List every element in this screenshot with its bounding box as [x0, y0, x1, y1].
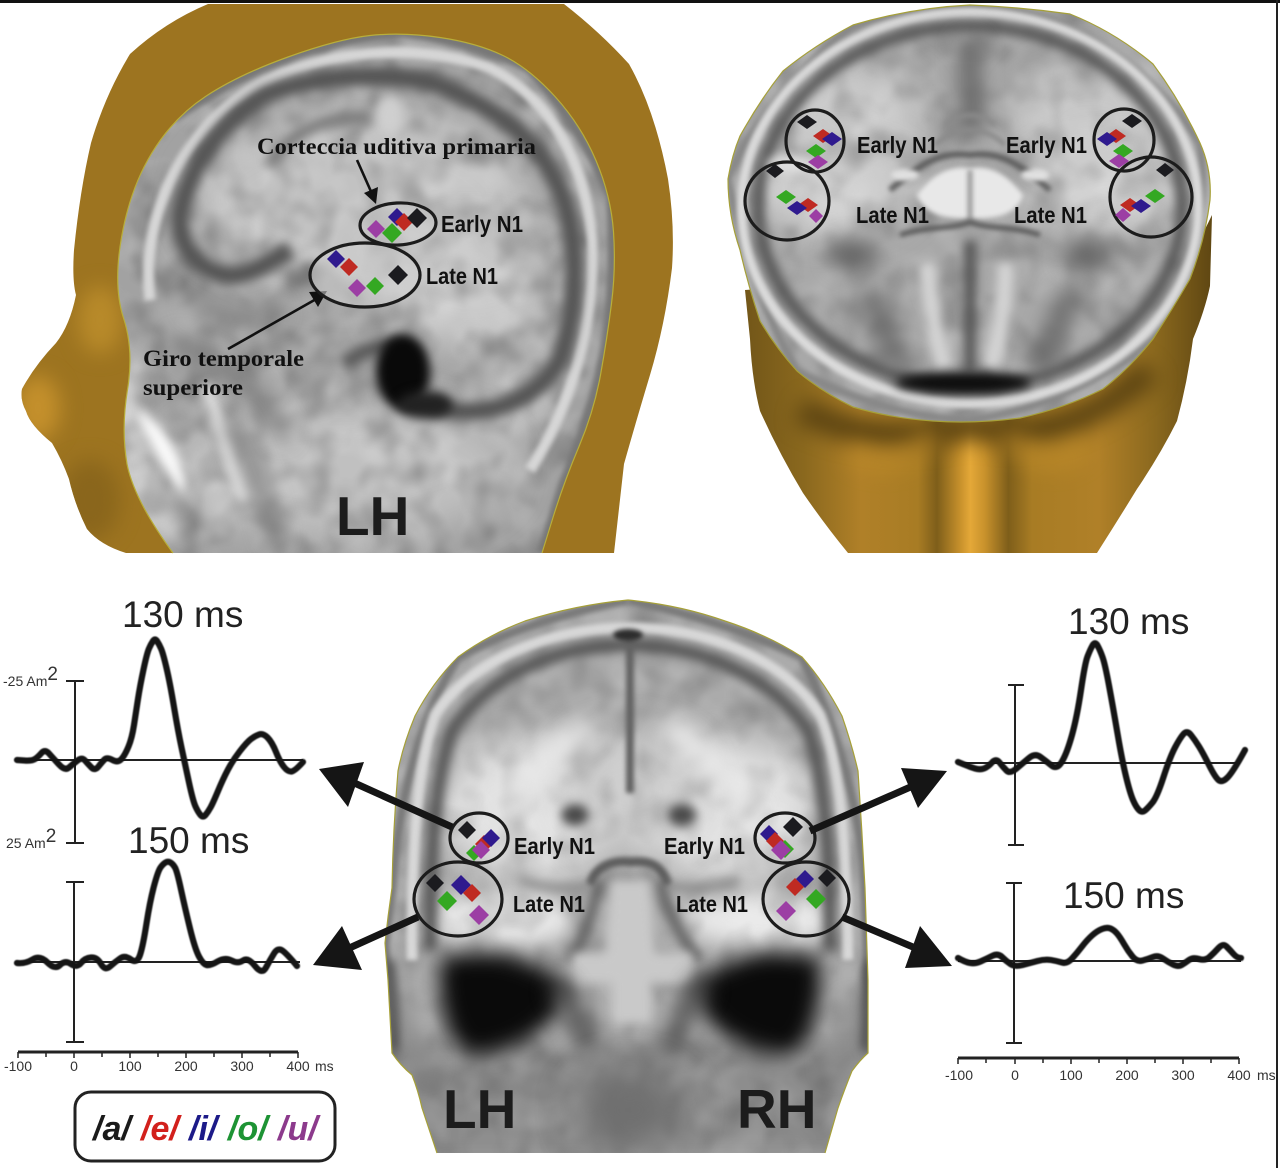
title: 150 ms: 150 ms [1063, 875, 1184, 916]
label: right Late N1: Late N1 [676, 891, 748, 917]
label: left Early N1: Early N1 [514, 833, 595, 859]
label: RH: RH [737, 1078, 816, 1140]
legend: vowels: /e/ [139, 1110, 182, 1148]
chart: right time axis: 300 [1171, 1067, 1195, 1083]
cluster: left Late N1 [414, 862, 502, 936]
cluster: Early N1 [359, 201, 437, 247]
label: -25 Am2: 2 [47, 664, 58, 685]
text: Giro temporale superiore [143, 346, 304, 400]
chart: left Late N1 waveform [17, 820, 300, 1042]
arrow: left Late N1 to waveform [313, 917, 418, 970]
label: 25 Am2: 2 [46, 826, 56, 847]
panel: sagittal head, left hemisphere [0, 0, 690, 560]
label: LH: LH [336, 485, 409, 547]
chart: right time axis: ms [1257, 1067, 1276, 1083]
head silhouette [0, 0, 690, 560]
chart: left time axis: 0 [70, 1058, 78, 1074]
trace [958, 643, 1245, 812]
text: Corteccia uditiva primaria: Corteccia uditiva primaria [257, 134, 537, 159]
title: 150 ms: 150 ms [128, 820, 249, 861]
cluster: left Late N1 [745, 162, 829, 240]
legend: vowels: /i/ [187, 1110, 221, 1148]
label: right Early N1: Early N1 [664, 833, 745, 859]
panel: rear-top coronal head [725, 0, 1220, 553]
label: Early N1: Early N1 [441, 211, 523, 237]
right border [1276, 0, 1278, 1168]
cluster: right Late N1 [763, 862, 849, 936]
chart: right time axis: 400 [1227, 1067, 1251, 1083]
label: left Late N1: Late N1 [513, 891, 585, 917]
text: Giro temporale superiore: superiore [143, 375, 243, 400]
cluster: Late N1 [310, 243, 420, 307]
legend: vowels [75, 1092, 335, 1161]
cluster: left Early N1 [450, 813, 508, 863]
cluster: right Early N1 [1094, 109, 1154, 171]
chart: left time axis: ms [315, 1058, 334, 1074]
chart: right time axis [945, 1058, 1276, 1083]
chart: right time axis: 100 [1059, 1067, 1083, 1083]
chart: left time axis: 200 [174, 1058, 198, 1074]
label: 25 Am2: 25 Am [6, 835, 46, 851]
label: left Early N1: Early N1 [857, 132, 938, 158]
cluster: left Early N1 [786, 110, 844, 172]
cluster: right Late N1 [1110, 157, 1192, 237]
title: 130 ms: 130 ms [122, 594, 243, 635]
chart: left Early N1 waveform [3, 594, 303, 851]
chart: left time axis: 300 [230, 1058, 254, 1074]
brain slice [725, 0, 1220, 425]
panel: frontal coronal slice [380, 595, 880, 1160]
label: right Early N1: Early N1 [1006, 132, 1087, 158]
chart: right time axis: 0 [1011, 1067, 1019, 1083]
brain slice [118, 34, 614, 553]
chart: left time axis: 100 [118, 1058, 142, 1074]
trace [17, 640, 303, 816]
cluster: right Early N1 [755, 813, 815, 863]
label: right Late N1: Late N1 [1014, 202, 1087, 228]
legend: vowels: /o/ [226, 1110, 271, 1148]
chart: left time axis: 400 [286, 1058, 310, 1074]
title: 130 ms: 130 ms [1068, 601, 1189, 642]
arrow: superior temporal gyrus [228, 291, 327, 349]
top border [0, 0, 1280, 3]
chart: left time axis [4, 1052, 334, 1074]
chart: right Late N1 waveform [958, 875, 1241, 1043]
label: LH: LH [443, 1078, 516, 1140]
trace [17, 862, 297, 971]
chart: left time axis: -100 [4, 1058, 32, 1074]
neck silhouette [745, 215, 1212, 553]
legend: vowels: /u/ [276, 1110, 321, 1148]
brain slice [380, 595, 880, 1160]
label: -25 Am2: -25 Am [3, 673, 47, 689]
arrow: left Early N1 to waveform [319, 762, 452, 827]
arrow: primary auditory cortex [357, 160, 378, 204]
arrow: right Early N1 to waveform [810, 768, 947, 831]
label: Late N1: Late N1 [426, 263, 498, 289]
chart: right Early N1 waveform [958, 601, 1245, 845]
text: Giro temporale superiore: Giro temporale [143, 346, 304, 371]
chart: right time axis: -100 [945, 1067, 973, 1083]
legend: vowels: /a/ [91, 1110, 134, 1148]
label: left Late N1: Late N1 [856, 202, 929, 228]
trace [958, 928, 1241, 966]
arrow: right Late N1 to waveform [842, 917, 952, 968]
chart: right time axis: 200 [1115, 1067, 1139, 1083]
